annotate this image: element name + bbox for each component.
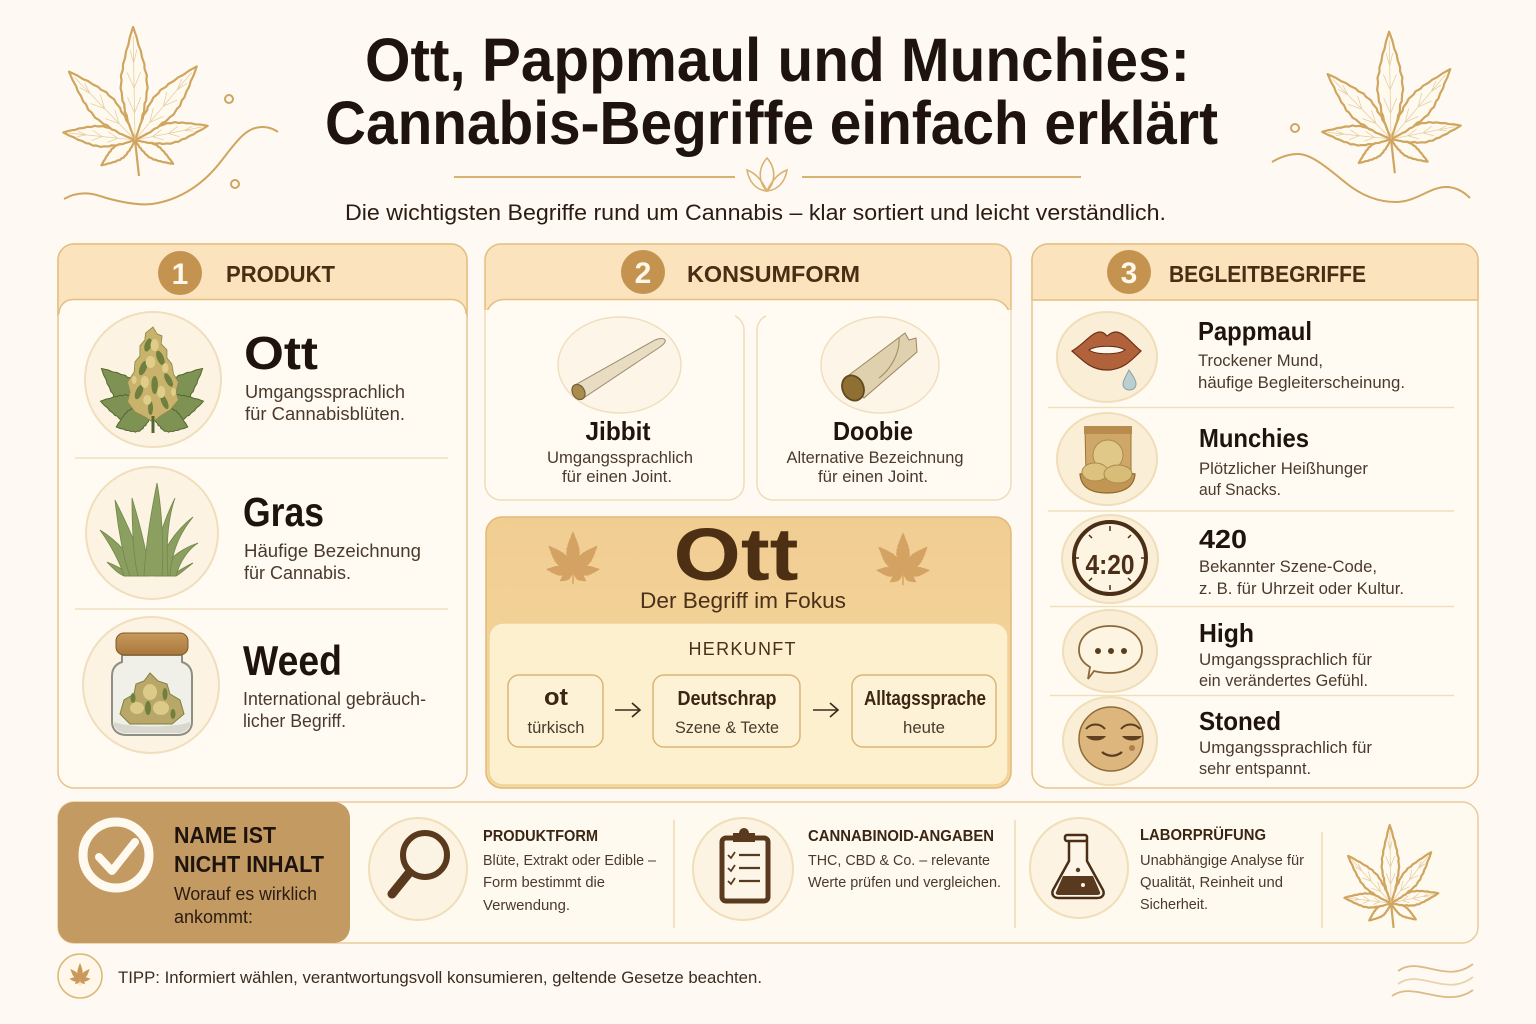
term description: International gebräuch-: [243, 689, 426, 709]
title divider with lotus: [454, 158, 1081, 191]
title: [325, 26, 1218, 157]
section heading: BEGLEITBEGRIFFE: [1169, 261, 1366, 287]
icon: clock 4:20: [1073, 522, 1147, 594]
icon: flask: [1052, 835, 1104, 898]
icon: speech bubble: [1079, 626, 1142, 679]
item text: THC, CBD & Co. – relevante: [808, 852, 990, 869]
step: Alltagssprache: heute: [903, 718, 945, 737]
section number 1: [158, 251, 202, 295]
term name: Weed: [243, 637, 342, 684]
callout text: ankommt:: [174, 907, 253, 927]
term description: Trockener Mund,: [1198, 352, 1323, 370]
term name: Jibbit: [586, 416, 651, 446]
icon: glass jar with bud: [112, 633, 192, 735]
term name: Stoned: [1199, 706, 1281, 736]
term description: [243, 689, 426, 731]
term: High: [1063, 610, 1373, 692]
section number 2: 2: [635, 257, 651, 290]
section number 3: 3: [1121, 257, 1137, 290]
arrow: [813, 703, 838, 717]
term description: [1199, 739, 1373, 778]
icon: grass: [100, 483, 198, 576]
panel: focus term Ott: [486, 513, 1011, 788]
icon: doobie: [838, 333, 917, 404]
step: Deutschrap: Deutschrap: [678, 687, 776, 710]
item heading: CANNABINOID-ANGABEN: [808, 828, 994, 845]
step: ot: [508, 675, 603, 747]
callout heading: NICHT INHALT: [174, 851, 324, 877]
icon: leaf left: [544, 531, 602, 584]
tip line: [58, 954, 762, 998]
term description: [244, 541, 421, 583]
term: Munchies: [1057, 413, 1368, 505]
term name: 420: [1199, 524, 1247, 554]
term description: [1198, 352, 1405, 392]
item heading: PRODUKTFORM: [483, 828, 598, 845]
item text: Blüte, Extrakt oder Edible –: [483, 852, 657, 869]
term description: [245, 382, 405, 424]
decoration: waves: [1392, 964, 1473, 997]
icon: thin joint: [569, 338, 665, 402]
term name: Pappmaul: [1198, 316, 1312, 346]
step: Alltagssprache: Alltagssprache: [864, 688, 986, 710]
origin heading: HERKUNFT: [688, 639, 796, 659]
focus subtitle: Der Begriff im Fokus: [640, 588, 846, 613]
callout text: Worauf es wirklich: [174, 884, 317, 904]
tip text: TIPP: Informiert wählen, verantwortungsvoll konsumieren, geltende Gesetze beachten.: [118, 968, 762, 987]
section heading: PRODUKT: [226, 261, 335, 287]
item text: Unabhängige Analyse für: [1140, 852, 1304, 869]
term description: sehr entspannt.: [1199, 760, 1311, 778]
decoration: top left leaf: [60, 27, 278, 204]
item: Laborprüfung: [1030, 818, 1304, 918]
origin panel: [489, 623, 1008, 785]
card: Doobie: [757, 310, 1011, 500]
icon: leaf right: [874, 532, 932, 585]
title: Cannabis-Begriffe einfach erklärt: [325, 89, 1218, 157]
item: Produktform: [369, 818, 657, 920]
icon: lips with drop: [1072, 332, 1141, 390]
step: Deutschrap: Szene & Texte: [675, 718, 779, 737]
term: Stoned: [1063, 697, 1373, 785]
term: 420: [1062, 515, 1404, 603]
term description: für einen Joint.: [818, 468, 928, 486]
item text: [1140, 852, 1304, 913]
section number 3: [1107, 250, 1151, 294]
decoration: top right leaf: [1272, 31, 1470, 202]
item text: [808, 852, 1001, 891]
title: Ott, Pappmaul und Munchies:: [365, 26, 1190, 94]
term description: ein verändertes Gefühl.: [1199, 672, 1368, 690]
section number 1: 1: [172, 258, 188, 291]
icon: cannabis bud: [92, 327, 212, 438]
item text: Sicherheit.: [1140, 896, 1208, 913]
term description: Bekannter Szene-Code,: [1199, 558, 1377, 576]
term description: [1199, 460, 1368, 499]
icon: outlined leaf: [1342, 825, 1440, 928]
term name: Ott: [244, 327, 318, 379]
term description: z. B. für Uhrzeit oder Kultur.: [1199, 580, 1404, 598]
item text: Form bestimmt die: [483, 874, 605, 891]
item text: [483, 852, 657, 914]
term description: [1199, 558, 1404, 598]
step: Alltagssprache: [852, 675, 996, 747]
item heading: LABORPRÜFUNG: [1140, 825, 1266, 844]
term: Weed: [83, 617, 426, 753]
panel: Begleitbegriffe: [1032, 244, 1478, 788]
icon: tip leaf badge: [58, 954, 102, 998]
term description: auf Snacks.: [1199, 481, 1281, 499]
card: Jibbit: [485, 310, 744, 500]
term description: Plötzlicher Heißhunger: [1199, 460, 1368, 478]
term name: Munchies: [1199, 423, 1309, 453]
term description: häufige Begleiterscheinung.: [1198, 374, 1405, 392]
step: ot: türkisch: [528, 718, 584, 737]
term description: Umgangssprachlich für: [1199, 739, 1373, 757]
term description: Häufige Bezeichnung: [244, 541, 421, 561]
term description: für einen Joint.: [562, 468, 672, 486]
term: Pappmaul: [1057, 312, 1405, 402]
term description: Alternative Bezeichnung: [786, 449, 964, 467]
callout heading: [174, 822, 324, 877]
panel: Konsumform: [485, 244, 1011, 500]
term name: Gras: [243, 489, 324, 535]
item: Cannabinoid-Angaben: [693, 818, 1001, 920]
icon: relaxed face: [1079, 707, 1143, 771]
callout text: [174, 884, 317, 927]
term: Ott: [85, 312, 405, 447]
item text: Verwendung.: [483, 897, 570, 914]
subtitle: Die wichtigsten Begriffe rund um Cannabis – klar sortiert und leicht verständlich.: [345, 200, 1166, 225]
term description: [1199, 651, 1373, 690]
term description: licher Begriff.: [243, 711, 346, 731]
item text: Qualität, Reinheit und: [1140, 874, 1283, 891]
icon: check ring: [83, 822, 149, 888]
term description: Umgangssprachlich für: [1199, 651, 1373, 669]
icon: clock 4:20: 4:20: [1086, 549, 1134, 580]
term: Gras: [86, 467, 421, 599]
callout: Name ist nicht Inhalt: [58, 802, 350, 943]
panel: bottom checklist: [58, 802, 1478, 943]
section heading: KONSUMFORM: [687, 261, 860, 287]
icon: magnifier: [392, 833, 447, 894]
term description: Umgangssprachlich: [547, 449, 693, 467]
step: Deutschrap: [653, 675, 800, 747]
section number 2: [621, 250, 665, 294]
term description: [786, 449, 964, 486]
focus word: Ott: [674, 513, 798, 596]
step: ot: ot: [544, 684, 568, 711]
term description: Umgangssprachlich: [245, 382, 405, 402]
item text: Werte prüfen und vergleichen.: [808, 874, 1001, 891]
icon: snack bag and bowl: [1080, 426, 1135, 493]
term description: für Cannabis.: [244, 563, 351, 583]
arrow: [615, 703, 640, 717]
term name: Doobie: [833, 416, 913, 446]
panel: Produkt: [58, 244, 467, 788]
term description: [547, 449, 693, 486]
term description: für Cannabisblüten.: [245, 404, 405, 424]
term name: High: [1199, 618, 1254, 648]
callout heading: NAME IST: [174, 822, 276, 848]
icon: clipboard: [722, 828, 768, 901]
